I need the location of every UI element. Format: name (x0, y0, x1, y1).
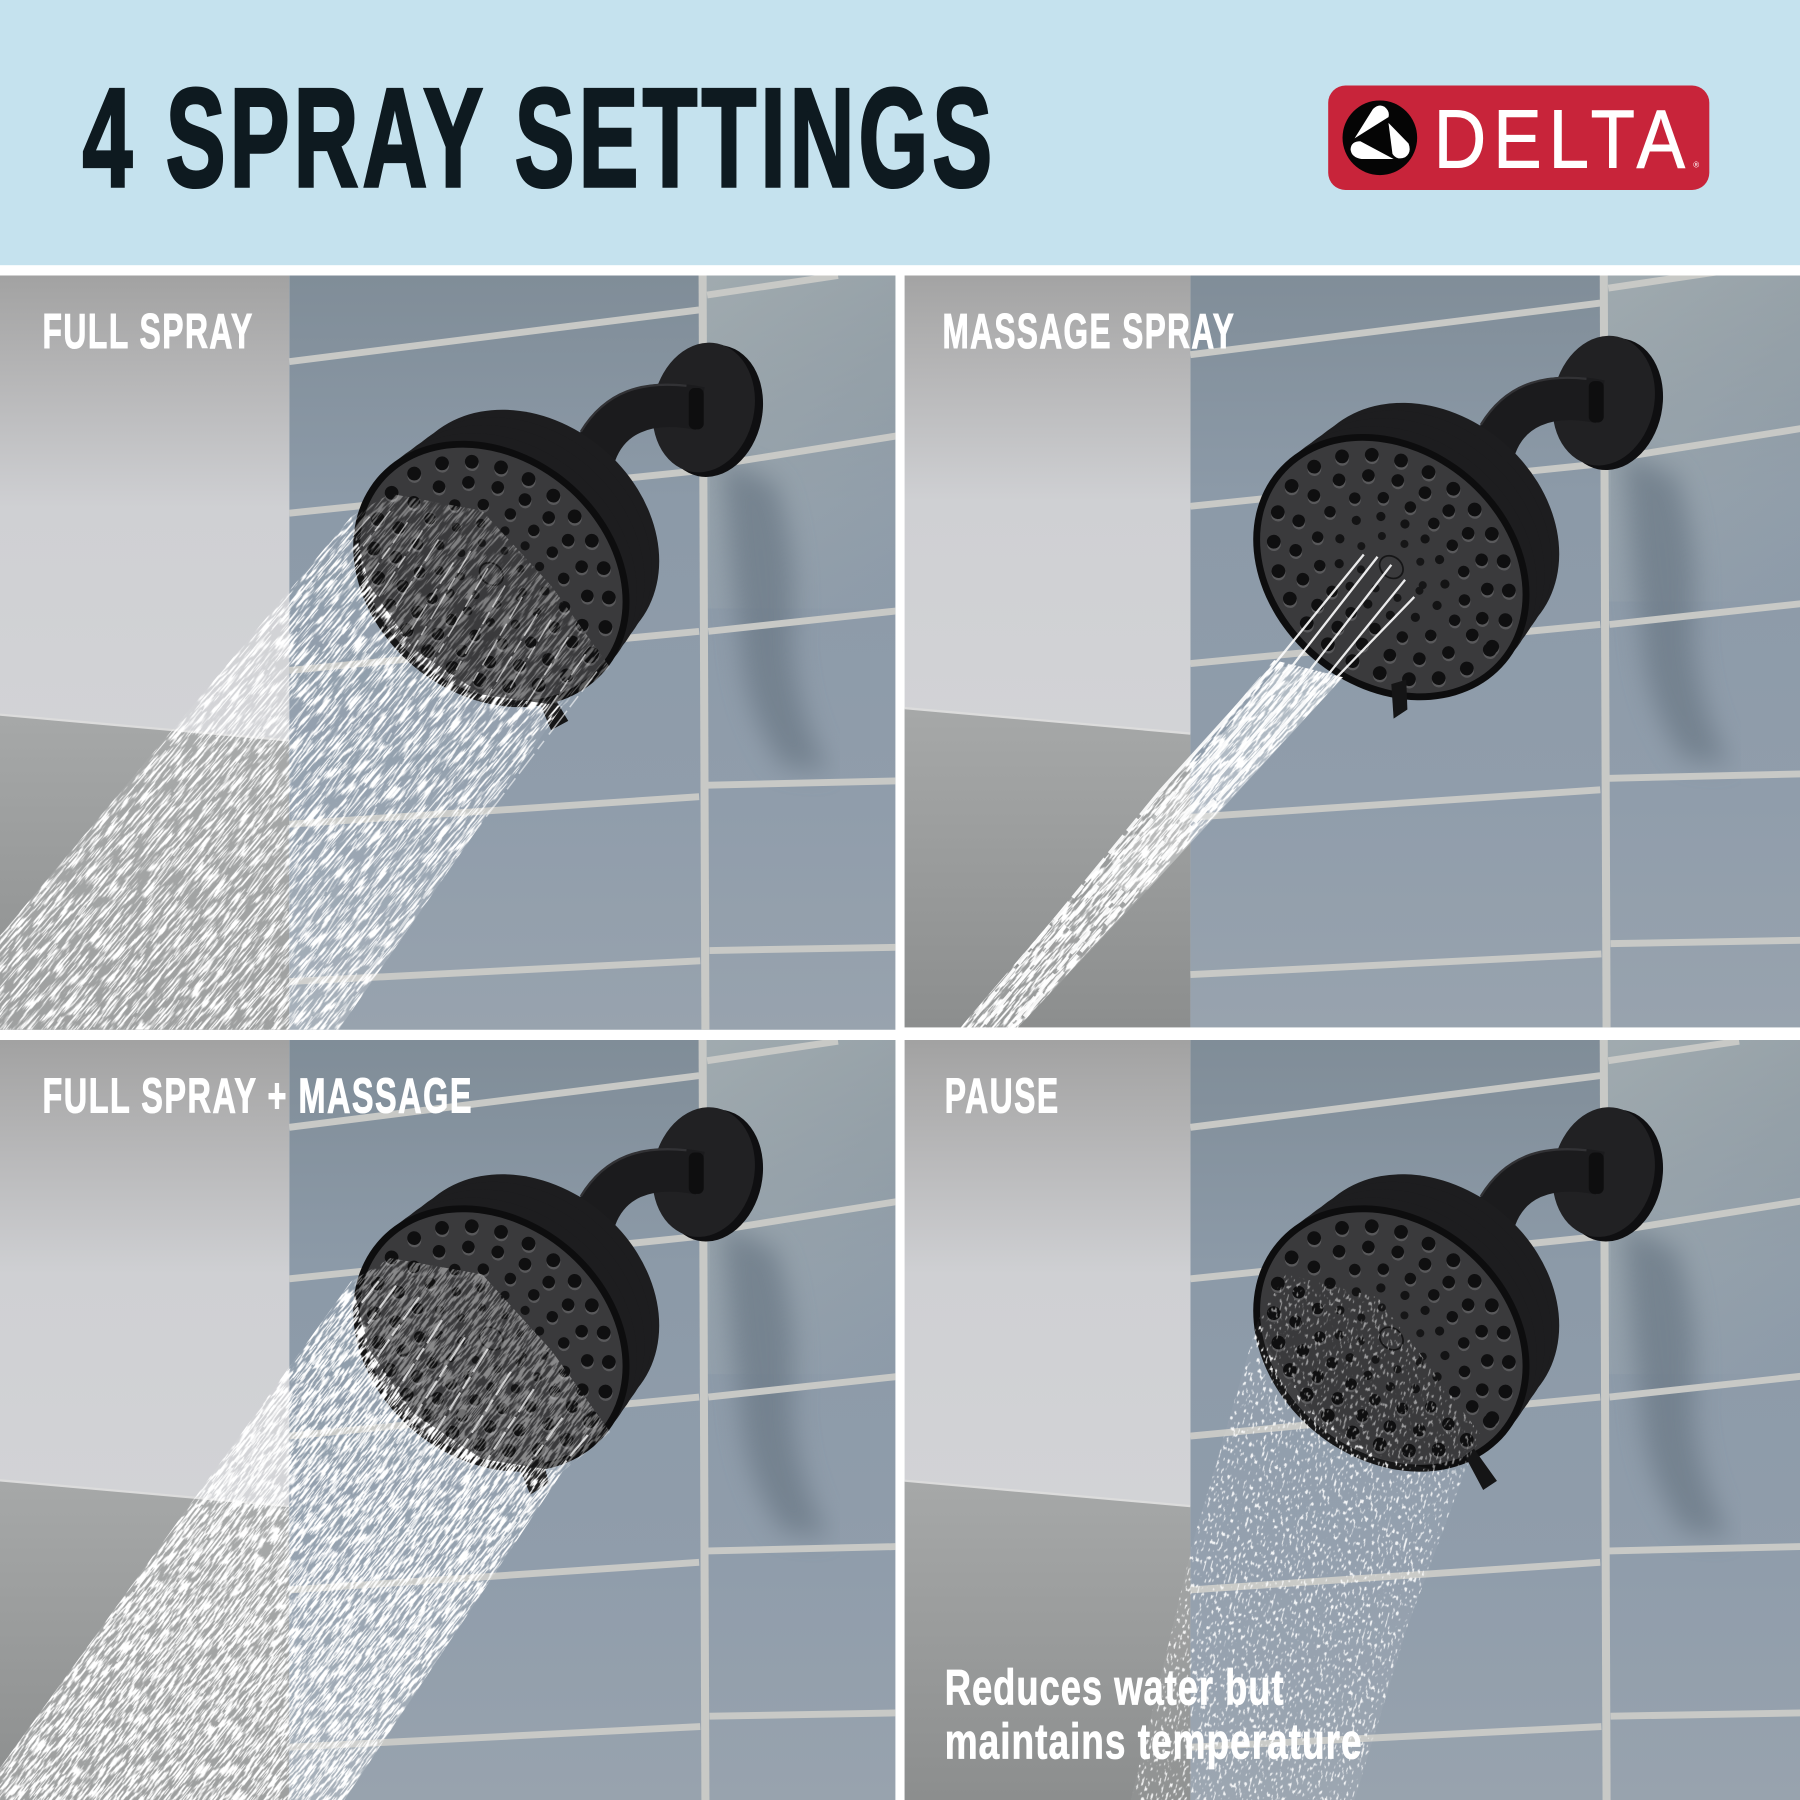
spray: massage jet (959, 554, 1414, 1030)
logo: Delta: ® (1693, 161, 1699, 170)
icon: head lever (1465, 1449, 1497, 1490)
panel: pause (894, 1030, 1800, 1800)
spray: pause droplets (1131, 1274, 1481, 1800)
icon: head lever (1391, 680, 1407, 719)
header band (0, 0, 1800, 265)
label: full spray plus massage: FULL SPRAY + MASSAGE (42, 1068, 473, 1123)
label: massage spray: MASSAGE SPRAY (942, 304, 1235, 359)
spray: full spray water (0, 494, 611, 1030)
logo: Delta: DELTA (1434, 93, 1692, 186)
logo: Delta (1328, 86, 1709, 190)
title: 4 SPRAY SETTINGS (83, 59, 996, 216)
icon: head lever (541, 702, 568, 730)
panel: full spray plus massage (0, 1030, 909, 1800)
panel: full spray (0, 264, 909, 1034)
panel: massage spray (894, 257, 1800, 1030)
text: pause description: Reduces water but (945, 1659, 1285, 1716)
text: pause description (945, 1659, 1363, 1770)
label: full spray: FULL SPRAY (42, 304, 254, 359)
spray: combined water (0, 1258, 611, 1800)
icon: head lever (519, 1453, 549, 1495)
text: pause description: maintains temperature (945, 1713, 1363, 1770)
text: pause heading: PAUSE (945, 1068, 1060, 1123)
